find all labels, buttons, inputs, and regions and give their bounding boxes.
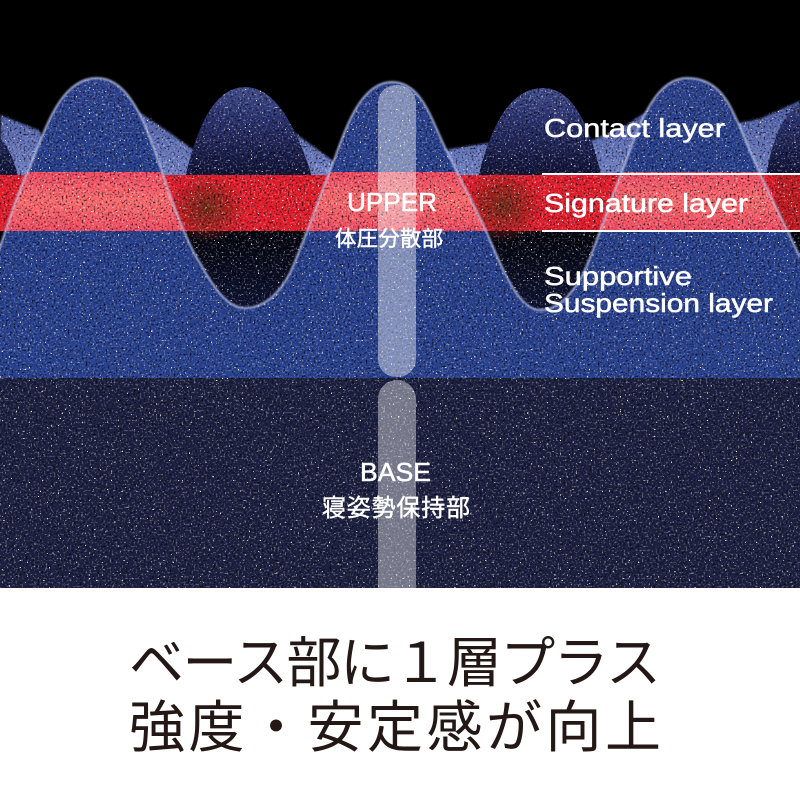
background: black sky bbox=[0, 0, 800, 590]
headline: ベース部に１層プラス bbox=[129, 632, 661, 694]
label: 体圧分散部: 体圧分散部 bbox=[335, 227, 443, 251]
label: BASE: BASE bbox=[360, 457, 431, 487]
bottom white panel bbox=[0, 588, 800, 801]
layer label: Signature layer: Signature layer bbox=[544, 188, 748, 218]
translucent pill: base bbox=[378, 380, 416, 588]
back ridges bbox=[0, 100, 800, 190]
layer label: Supportive Suspension layer bbox=[544, 261, 773, 318]
foam illustration bbox=[0, 78, 800, 588]
headline bbox=[129, 632, 661, 759]
upper foam layer with wave profile bbox=[0, 78, 800, 378]
headline: 強度・安定感が向上 bbox=[129, 696, 661, 759]
signature layer band on front wave bbox=[0, 172, 800, 231]
base foam layer bbox=[0, 378, 800, 588]
layer label: Contact layer: Contact layer bbox=[544, 113, 725, 143]
label: UPPER: UPPER bbox=[347, 187, 437, 217]
translucent pill: upper bbox=[378, 85, 416, 377]
front foam wave bbox=[0, 78, 800, 378]
label: 寝姿勢保持部: 寝姿勢保持部 bbox=[322, 495, 470, 522]
layer label: Supportive Suspension layer: Supportive bbox=[544, 261, 692, 291]
back row bumps bbox=[0, 87, 800, 320]
red band seen in valleys bbox=[0, 170, 800, 242]
layer label: Supportive Suspension layer: Suspension layer bbox=[544, 288, 773, 318]
wave rim highlight bbox=[0, 78, 800, 310]
layer divider lines bbox=[542, 174, 800, 231]
